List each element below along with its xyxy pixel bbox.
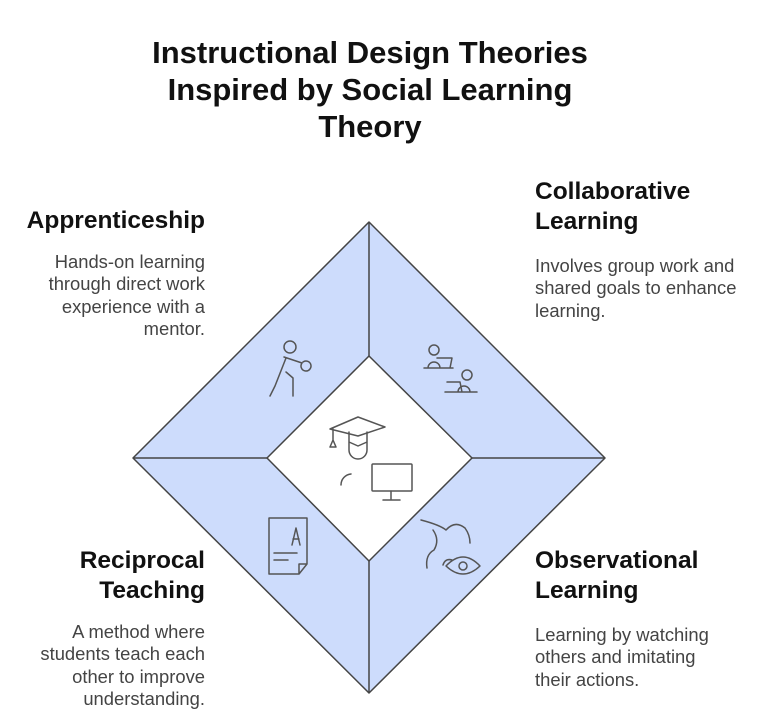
heading: Observational Learning [535, 547, 698, 604]
title: Theory [318, 109, 422, 144]
text: observational: their actions. [535, 669, 639, 690]
text: observational: others and imitating [535, 646, 696, 667]
text: apprenticeship: mentor. [144, 318, 205, 339]
text: reciprocal: understanding. [83, 688, 205, 709]
text: reciprocal: students teach each [40, 643, 205, 664]
text: collaborative: shared goals to enhance [535, 277, 736, 298]
text: observational [535, 624, 709, 690]
text: apprenticeship: through direct work [49, 273, 205, 294]
text: collaborative: learning. [535, 300, 606, 321]
heading: Collaborative Learning: Learning [535, 208, 638, 235]
text: reciprocal [40, 621, 205, 709]
text: reciprocal: A method where [72, 621, 205, 642]
text: apprenticeship: Hands-on learning [55, 251, 205, 272]
icon: collaboration [424, 345, 477, 392]
text: collaborative [535, 255, 736, 321]
heading: Reciprocal Teaching [80, 547, 205, 604]
title [152, 35, 588, 144]
heading: Reciprocal Teaching: Reciprocal [80, 547, 205, 574]
icon: bird and eye [421, 520, 480, 574]
title: Inspired by Social Learning [168, 72, 572, 107]
icon: person [270, 341, 311, 396]
text: apprenticeship [48, 251, 205, 339]
text: observational: Learning by watching [535, 624, 709, 645]
heading: Collaborative Learning: Collaborative [535, 178, 690, 205]
text: apprenticeship: experience with a [62, 296, 205, 317]
title: Instructional Design Theories [152, 35, 588, 70]
text: collaborative: Involves group work and [535, 255, 734, 276]
icon: document A [269, 518, 307, 574]
heading: Apprenticeship: Apprenticeship [27, 207, 205, 234]
text: reciprocal: other to improve [72, 666, 205, 687]
heading: Reciprocal Teaching: Teaching [99, 577, 205, 604]
heading: Collaborative Learning [535, 178, 690, 235]
heading: Observational Learning: Learning [535, 577, 638, 604]
icon: graduate with computer [330, 417, 412, 500]
heading: Observational Learning: Observational [535, 547, 698, 574]
